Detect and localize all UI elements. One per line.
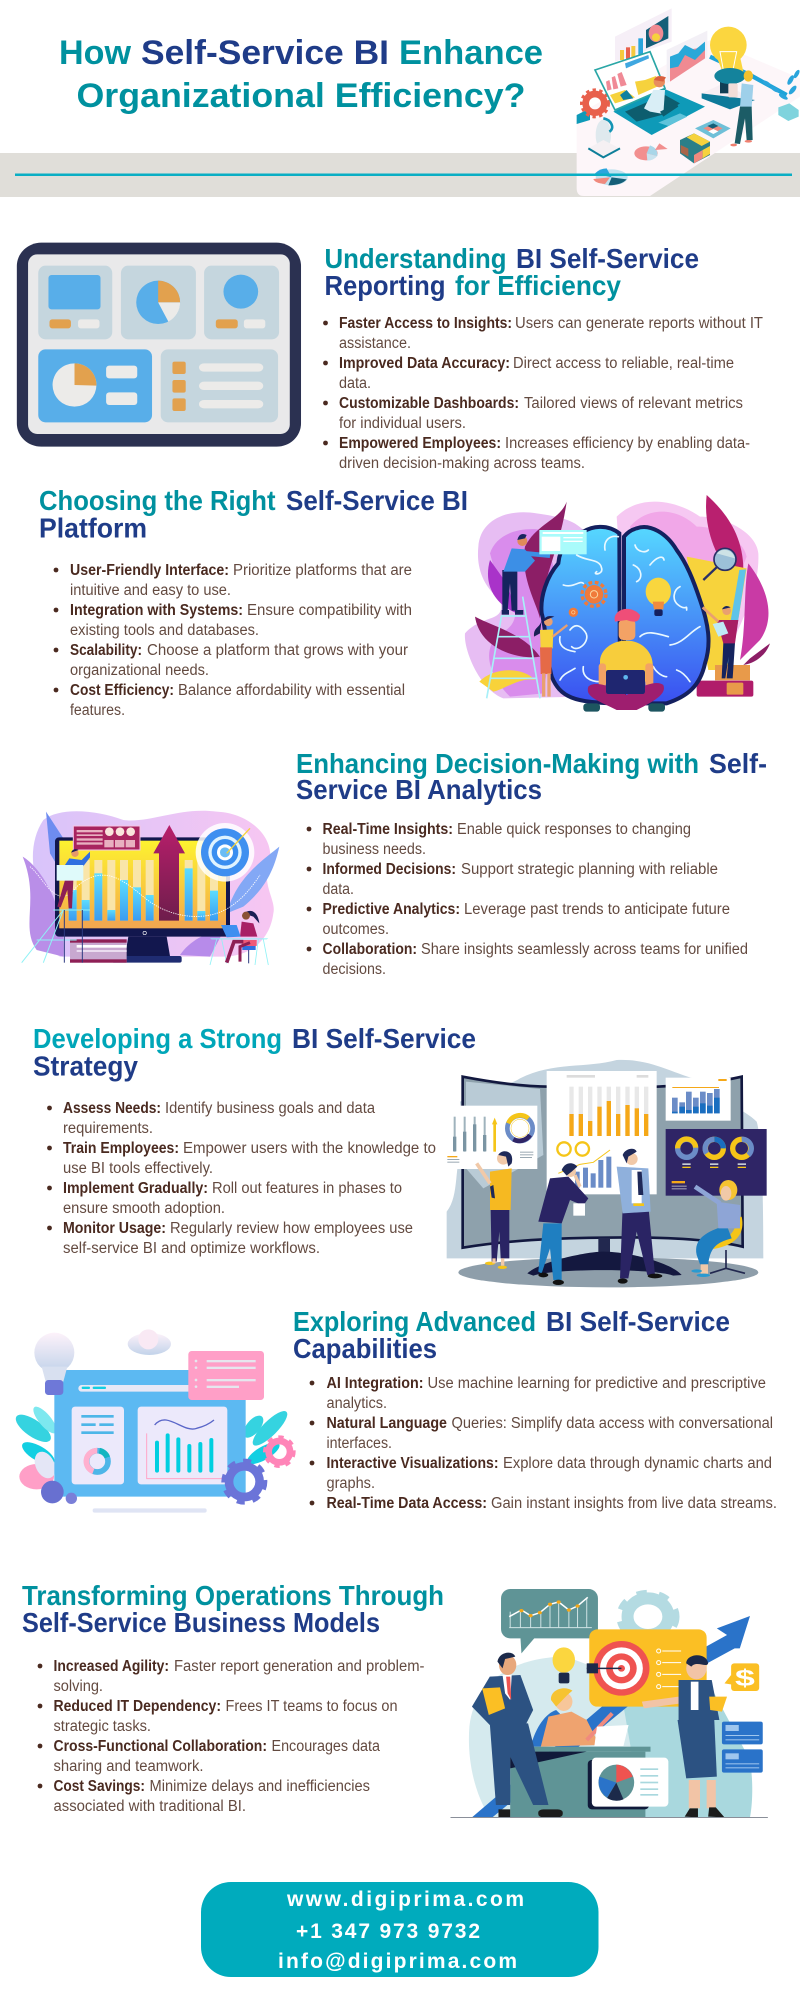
bullet list: Collaboration: [322, 941, 417, 958]
bullet list: outcomes. [322, 921, 389, 938]
title: How [59, 34, 132, 72]
heading: BI Self-Service [292, 1023, 476, 1054]
bullet list: Predictive Analytics: [322, 901, 460, 918]
bullet list: Increases efficiency by enabling data- [505, 435, 750, 452]
heading: Self-Service Business Models [22, 1607, 380, 1638]
title [59, 34, 543, 115]
bullet list: self-service BI and optimize workflows. [63, 1240, 320, 1257]
heading: Capabilities [293, 1333, 437, 1364]
heading [33, 1023, 476, 1082]
bullet list: solving. [54, 1678, 103, 1695]
bullet list: data. [322, 881, 354, 898]
bullet list [54, 562, 412, 719]
bullet list: Cost Efficiency: [70, 682, 174, 699]
heading: BI Self-Service [516, 243, 699, 274]
bullet list: Direct access to reliable, real-time [513, 355, 734, 372]
title: Self-Service BI [141, 34, 389, 72]
bullet list: Minimize delays and inefficiencies [150, 1778, 370, 1795]
bullet list: business needs. [322, 841, 426, 858]
bullet list: use BI tools effectively. [63, 1160, 213, 1177]
bullet list: Users can generate reports without IT [515, 315, 763, 332]
heading: Strategy [33, 1050, 139, 1082]
panel: developing strategy [33, 1023, 767, 1287]
bullet list: User-Friendly Interface: [70, 562, 229, 579]
icon: business team with target: $ [735, 1666, 755, 1691]
panel: transforming operations [22, 1580, 768, 1818]
bullet list: requirements. [63, 1120, 153, 1137]
bullet list: interfaces. [326, 1435, 392, 1452]
bullet list [310, 1375, 777, 1512]
bullet list: Scalability: [70, 642, 142, 659]
bullet list: associated with traditional BI. [54, 1798, 246, 1815]
bullet list: Identify business goals and data [165, 1100, 375, 1117]
heading: Self-Service BI [286, 485, 468, 516]
bullet list: Prioritize platforms that are [233, 562, 412, 579]
bullet list: Reduced IT Dependency: [54, 1698, 221, 1715]
bullet list: sharing and teamwork. [54, 1758, 204, 1775]
contact pill [201, 1882, 598, 1977]
bullet list: Empower users with the knowledge to [183, 1140, 436, 1157]
panel: enhancing decision-making [22, 748, 767, 978]
bullet list: Integration with Systems: [70, 602, 243, 619]
bullet list: Enable quick responses to changing [457, 821, 691, 838]
website: www.digiprima.com [286, 1888, 524, 1911]
heading: for Efficiency [455, 270, 622, 301]
icon: dashboard window with gears [12, 1329, 294, 1513]
title: Enhance [399, 34, 543, 72]
icon: isometric analytics workspace [577, 8, 800, 196]
bullet list: Use machine learning for predictive and prescriptive [428, 1375, 766, 1392]
heading: Choosing the Right [39, 485, 276, 516]
bullet list: Faster report generation and problem- [174, 1658, 424, 1675]
bullet list: Ensure compatibility with [247, 602, 412, 619]
bullet list: Real-Time Data Access: [326, 1495, 487, 1512]
bullet list: Informed Decisions: [322, 861, 456, 878]
bullet list: Roll out features in phases to [212, 1180, 402, 1197]
bullet list: intuitive and easy to use. [70, 582, 231, 599]
bullet list: driven decision-making across teams. [339, 455, 585, 472]
phone: +1 347 973 9732 [296, 1920, 480, 1943]
bullet list: Frees IT teams to focus on [226, 1698, 398, 1715]
bullet list: Implement Gradually: [63, 1180, 208, 1197]
heading [324, 243, 699, 301]
bullet list: Tailored views of relevant metrics [524, 395, 743, 412]
bullet list: Real-Time Insights: [322, 821, 453, 838]
bullet list: strategic tasks. [54, 1718, 151, 1735]
bullet list [307, 821, 748, 978]
bullet list: Empowered Employees: [339, 435, 501, 452]
bullet list: decisions. [322, 961, 386, 978]
icon: dashboard tablet [17, 243, 301, 447]
bullet list: Share insights seamlessly across teams for unified [421, 941, 748, 958]
bullet list: Monitor Usage: [63, 1220, 166, 1237]
bullet list: Choose a platform that grows with your [147, 642, 408, 659]
bullet list: Queries: Simplify data access with conversational [452, 1415, 773, 1432]
icon: monitor bar chart with target [22, 811, 279, 965]
bullet list: Natural Language [326, 1415, 447, 1432]
bullet list: ensure smooth adoption. [63, 1200, 225, 1217]
bullet list: graphs. [326, 1475, 375, 1492]
title: Organizational Efficiency? [76, 77, 526, 115]
icon: business team with target [451, 1589, 768, 1818]
heading [22, 1580, 444, 1638]
bullet list: Train Employees: [63, 1140, 179, 1157]
panel: choosing platform [39, 485, 770, 719]
bullet list: Gain instant insights from live data streams. [491, 1495, 777, 1512]
icon: brain with people [465, 495, 770, 712]
heading: Self- [709, 748, 767, 779]
heading [296, 748, 767, 805]
bullet list: Improved Data Accuracy: [339, 355, 510, 372]
bullet list: Balance affordability with essential [178, 682, 405, 699]
heading [39, 485, 468, 544]
bullet list: Support strategic planning with reliable [461, 861, 718, 878]
icon: team at analytics screen [447, 1060, 767, 1287]
heading: Service BI Analytics [296, 774, 542, 805]
bullet list: analytics. [326, 1395, 387, 1412]
panel: advanced capabilities [12, 1306, 777, 1513]
bullet list: features. [70, 702, 125, 719]
bullet list: organizational needs. [70, 662, 209, 679]
bullet list [38, 1658, 424, 1815]
heading: Reporting [324, 270, 446, 301]
bullet list [47, 1100, 436, 1257]
bullet list: AI Integration: [326, 1375, 424, 1392]
heading: Platform [39, 512, 147, 544]
bullet list: Assess Needs: [63, 1100, 161, 1117]
bullet list: Explore data through dynamic charts and [503, 1455, 772, 1472]
bullet list: Regularly review how employees use [170, 1220, 413, 1237]
bullet list: Cross-Functional Collaboration: [54, 1738, 267, 1755]
heading: BI Self-Service [546, 1306, 730, 1337]
heading: Understanding [324, 243, 506, 274]
email: info@digiprima.com [278, 1950, 517, 1973]
heading [293, 1306, 730, 1364]
header band [0, 153, 800, 197]
bullet list: Customizable Dashboards: [339, 395, 519, 412]
bullet list: existing tools and databases. [70, 622, 259, 639]
bullet list: Cost Savings: [54, 1778, 145, 1795]
divider line [15, 174, 792, 176]
bullet list: Increased Agility: [54, 1658, 169, 1675]
heading: Exploring Advanced [293, 1306, 536, 1337]
bullet list: Interactive Visualizations: [326, 1455, 498, 1472]
heading: Developing a Strong [33, 1023, 282, 1054]
bullet list: for individual users. [339, 415, 466, 432]
bullet list: Encourages data [272, 1738, 380, 1755]
bullet list: assistance. [339, 335, 411, 352]
heading: Transforming Operations Through [22, 1580, 444, 1611]
bullet list: Leverage past trends to anticipate future [464, 901, 730, 918]
bullet list [323, 315, 763, 472]
bullet list: data. [339, 375, 371, 392]
panel: understanding reporting [17, 243, 763, 472]
heading: Enhancing Decision-Making with [296, 748, 699, 779]
bullet list: Faster Access to Insights: [339, 315, 512, 332]
